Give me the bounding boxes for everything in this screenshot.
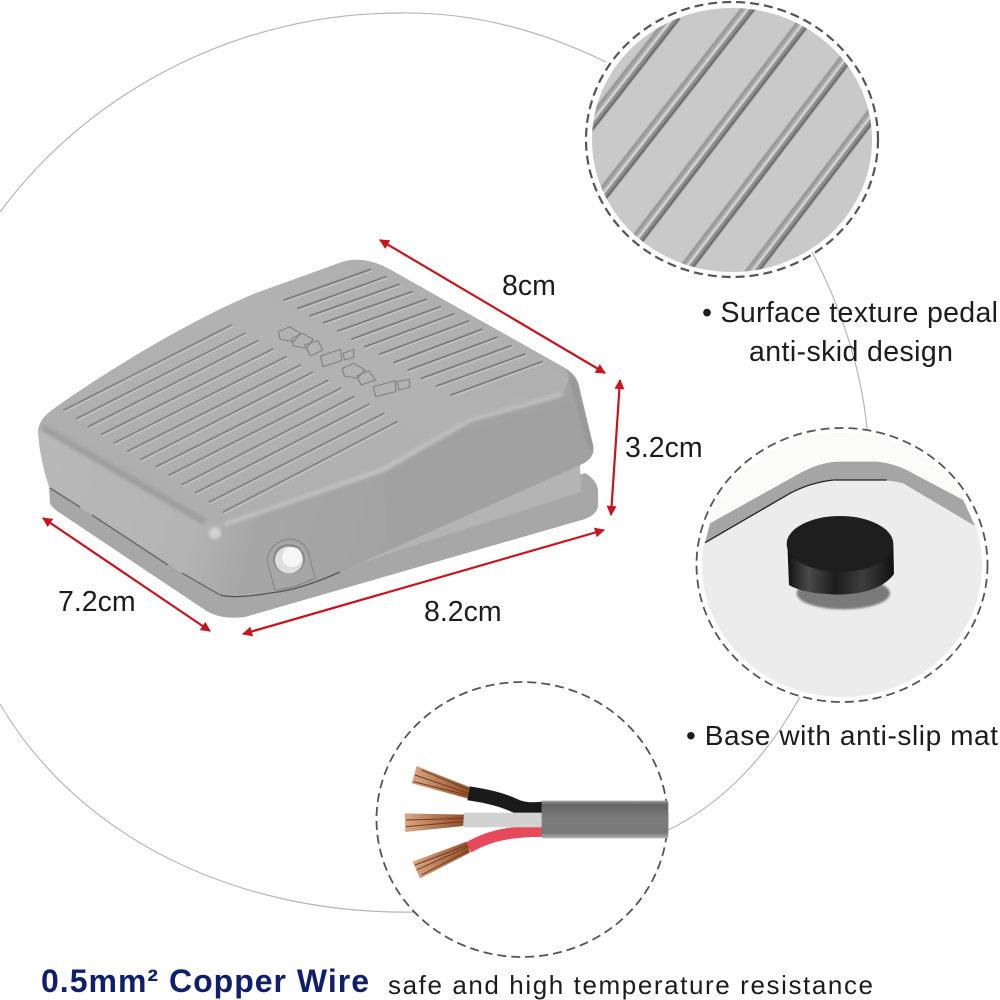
detail circle: surface texture [582,0,879,283]
copper strands middle [405,813,464,832]
edge shadow [705,480,887,543]
rubber foot [787,543,894,595]
large connecting arc [0,13,606,912]
black wire [468,793,547,809]
copper strands top [412,766,470,798]
heading: copper wire: 0.5mm² Copper Wire [41,963,369,999]
red wire [468,831,547,848]
dimension arrow: 7.2cm [43,518,210,631]
dimension label: 7.2cm: 7.2cm [58,586,136,618]
gray cable sheath [542,801,668,838]
front edge shading [42,427,205,522]
connector: mat circle to wire circle [668,697,800,830]
base plate slots [50,488,220,595]
gap under pedal [270,465,581,594]
detail circle: copper wire [376,682,668,957]
text: base feature: • Base with anti-slip mat [686,720,998,751]
embossed arrow logo [278,327,409,397]
caption: wire description: safe and high temperature resistance [388,970,873,1000]
strand detail [406,770,469,875]
copper strands bottom [413,842,470,878]
ribs [64,269,543,513]
pedal body [38,260,593,596]
foot pedal illustration [38,260,600,618]
detail circle: anti-slip mat [690,420,1000,702]
pedal top face [38,260,568,523]
gray edge band [705,462,975,543]
text: surface texture feature [702,297,998,368]
dimension label: 8cm: 8cm [502,270,556,302]
right edge shading [572,378,592,450]
darker side panel [570,428,594,470]
connector: texture circle to mat circle [812,252,867,430]
ridge highlight [225,394,563,524]
text: surface texture feature: anti-skid design [749,336,953,368]
dimension arrow: 3.2cm [611,380,620,515]
dimension arrow: 8cm [380,240,605,373]
white wire [464,813,544,827]
pedal lower edge shadow [220,572,340,597]
dimension label: 3.2cm: 3.2cm [625,432,703,464]
corner highlight [209,527,221,539]
pedal upper area [704,433,976,544]
pivot rivet [267,539,315,590]
pedal base plate [49,473,598,618]
dimension label: 8.2cm: 8.2cm [424,596,502,628]
text: surface texture feature: • Surface texture pedal [702,297,998,329]
felt pad [797,577,890,609]
dimension arrow: 8.2cm [243,530,604,634]
